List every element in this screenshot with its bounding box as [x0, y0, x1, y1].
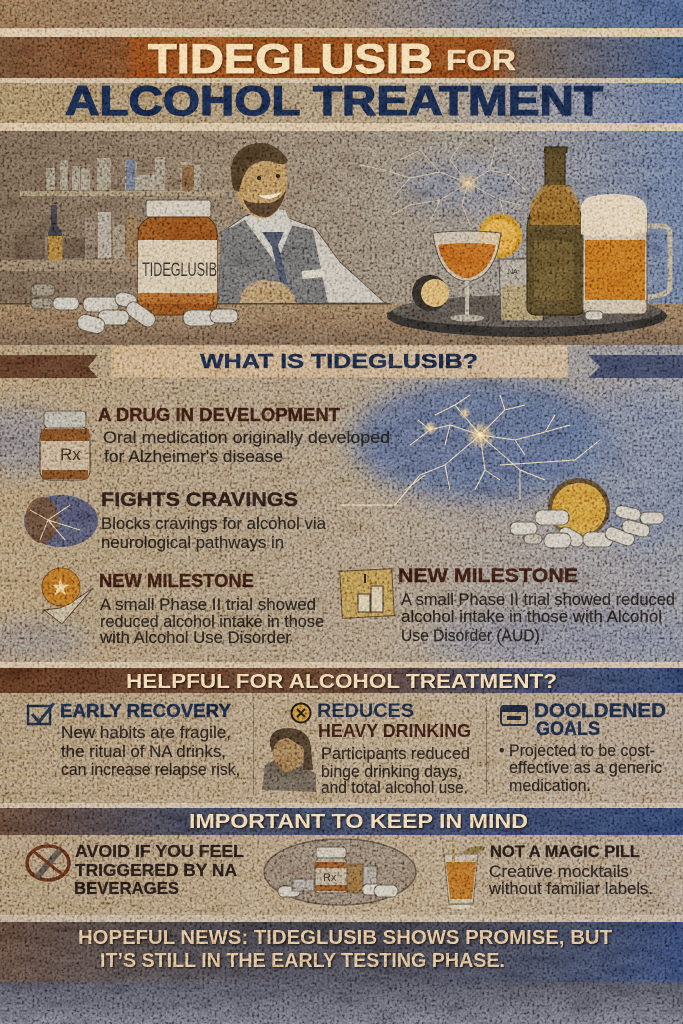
- heading: NEW MILESTONE: [99, 571, 254, 591]
- pill bottle: Tideglusib: TIDEGLUSIB: [142, 260, 217, 281]
- title: TIDEGLUSIB: [148, 35, 433, 82]
- section ribbons: [0, 345, 683, 378]
- panel: what is tideglusib: [0, 345, 683, 670]
- panel: important to keep in mind: [0, 803, 683, 915]
- body: and total alcohol use.: [321, 778, 468, 797]
- icon: neural circle: [24, 495, 98, 547]
- column: dooldened goals: [499, 701, 666, 795]
- water glass: NA: [508, 269, 518, 276]
- medication vignette: Rx: [323, 872, 337, 884]
- body: alcohol intake in those with Alcohol: [401, 607, 662, 626]
- illustration: bar scene: [0, 131, 683, 345]
- title: FOR: [446, 45, 516, 77]
- icon: medal and check: [42, 568, 93, 624]
- icon: calendar: [501, 706, 527, 725]
- heading: HEAVY DRINKING: [318, 720, 471, 741]
- body: without familiar labels.: [488, 879, 653, 898]
- panel: helpful for alcohol treatment: [0, 662, 683, 803]
- tray with drinks: [387, 147, 670, 337]
- icon: Rx bottle: Rx: [60, 445, 81, 464]
- item: new milestone left: [42, 568, 324, 647]
- pills on the bar: [31, 284, 238, 335]
- body: effective as a generic: [509, 758, 662, 777]
- body: New habits are fragile,: [61, 723, 231, 742]
- heading: NEW MILESTONE: [398, 565, 578, 587]
- pill bottle: Tideglusib: [138, 200, 217, 315]
- icon: medal and check: ★: [50, 574, 71, 600]
- beer bottle: [527, 147, 584, 315]
- icon: x circle: [292, 704, 310, 722]
- beer mug: [581, 194, 670, 314]
- body: can increase relapse risk,: [61, 760, 240, 779]
- body: Oral medication originally developed: [103, 428, 390, 447]
- column: reduces heavy drinking: [262, 701, 471, 797]
- coin and pills: [510, 478, 664, 550]
- icon: Rx bottle: [40, 411, 90, 480]
- footer text: HOPEFUL NEWS: TIDEGLUSIB SHOWS PROMISE, BUT: [78, 927, 612, 949]
- body: neurological pathways in: [101, 533, 284, 552]
- warning text: AVOID IF YOU FEEL: [75, 841, 244, 861]
- neuron illustration: [340, 395, 600, 505]
- neural web: [360, 142, 525, 225]
- icon: distressed man: [262, 728, 316, 792]
- body: reduced alcohol intake in those: [100, 612, 324, 631]
- icon: chart card: [340, 569, 394, 618]
- heading: GOALS: [536, 719, 600, 740]
- icon: mocktail: [444, 845, 486, 909]
- orange slice: [478, 214, 522, 258]
- body: A small Phase II trial showed reduced: [401, 590, 675, 609]
- cocktail: [433, 231, 501, 322]
- bartender: [218, 143, 385, 303]
- water glass: [499, 259, 545, 321]
- header band: [0, 0, 683, 131]
- body: the ritual of NA drinks,: [61, 742, 226, 761]
- warning text: TRIGGERED BY NA: [75, 860, 237, 880]
- heading: EARLY RECOVERY: [60, 701, 231, 721]
- warning text: BEVERAGES: [74, 878, 179, 898]
- title: [65, 35, 603, 124]
- item: fights cravings: [24, 489, 327, 552]
- body: Participants reduced: [321, 744, 470, 763]
- body: A small Phase II trial showed: [100, 595, 316, 614]
- column: early recovery: [28, 701, 240, 779]
- item: new milestone right: [340, 565, 675, 645]
- footer text: IT’S STILL IN THE EARLY TESTING PHASE.: [100, 950, 505, 972]
- body: Creative mocktails: [489, 862, 629, 881]
- item: a drug in development: [40, 404, 390, 480]
- heading: A DRUG IN DEVELOPMENT: [98, 404, 341, 425]
- body: • Projected to be cost-: [499, 741, 655, 760]
- title: ALCOHOL TREATMENT: [65, 77, 603, 124]
- body: binge drinking days,: [321, 762, 462, 781]
- heading: REDUCES: [317, 701, 414, 722]
- heading: IMPORTANT TO KEEP IN MIND: [189, 811, 528, 833]
- lemon half: [412, 275, 449, 311]
- shelves with bottles: [0, 157, 225, 271]
- body: for Alzheimer's disease: [104, 447, 283, 466]
- body: with Alcohol Use Disorder: [99, 628, 291, 647]
- footer band: [0, 915, 683, 1024]
- medication vignette: [264, 839, 416, 905]
- icon: checkbox: [28, 703, 54, 724]
- body: Blocks cravings for alcohol via: [101, 514, 327, 533]
- icon: no sign: [27, 846, 69, 880]
- heading: DOOLDENED: [534, 701, 666, 722]
- heading: NOT A MAGIC PILL: [490, 842, 640, 861]
- body: medication.: [509, 776, 591, 795]
- heading: FIGHTS CRAVINGS: [101, 489, 298, 511]
- body: Use Disorder (AUD).: [401, 626, 544, 645]
- section heading: WHAT IS TIDEGLUSIB?: [200, 351, 478, 373]
- heading: HELPFUL FOR ALCOHOL TREATMENT?: [126, 671, 557, 693]
